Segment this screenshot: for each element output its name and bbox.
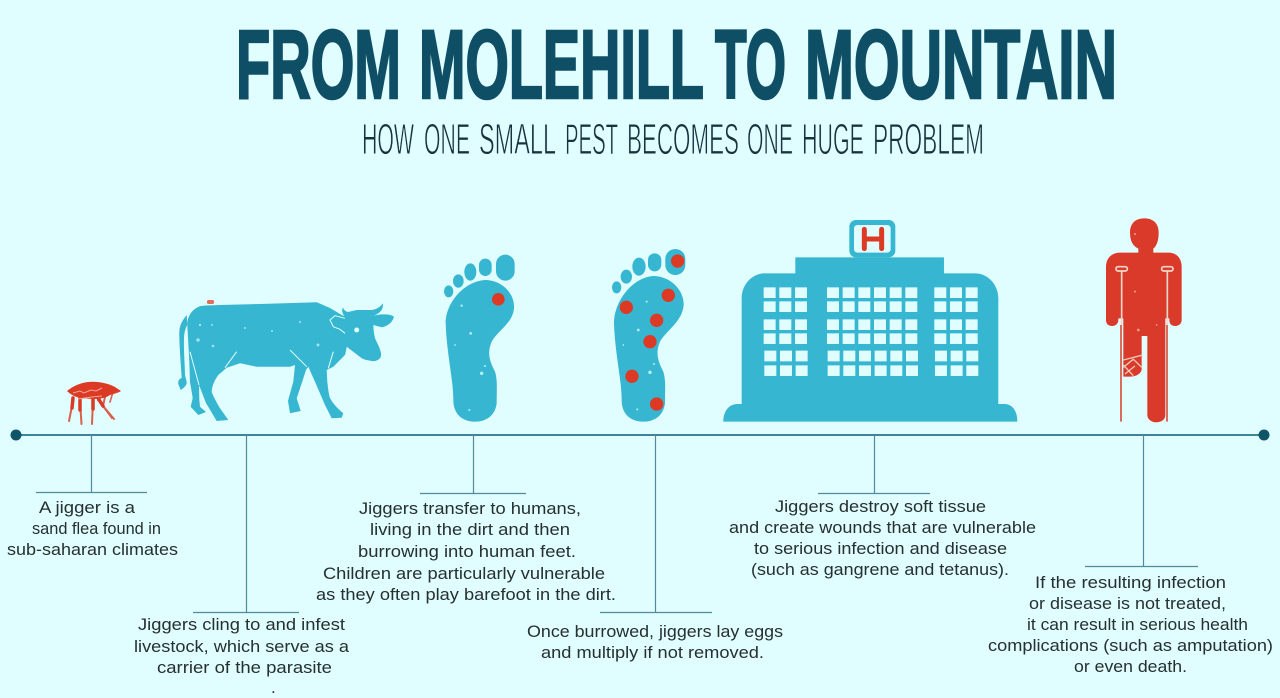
subtitle <box>362 115 984 164</box>
timeline <box>10 430 1270 612</box>
icon: person with amputated leg on crutches <box>1106 218 1182 422</box>
subtitle: HOW <box>362 115 414 164</box>
text block: livestock <box>134 615 350 697</box>
title: TO <box>715 10 786 119</box>
text block: jigger definition: sub-saharan climates <box>7 540 178 559</box>
title: MOLEHILL <box>419 10 704 119</box>
text block: tissue damage: Jiggers destroy soft tissue <box>775 497 986 516</box>
text block: health complications <box>988 573 1273 676</box>
text block: transfer to humans: Children are particularly vulnerable <box>323 564 605 583</box>
text block: tissue damage: (such as gangrene and tetanus). <box>751 560 1009 579</box>
text block: transfer to humans: Jiggers transfer to humans, <box>359 499 581 518</box>
subtitle: HUGE <box>802 115 864 164</box>
text block: eggs: and multiply if not removed. <box>541 643 764 662</box>
icon: cow <box>178 300 394 421</box>
text block: jigger definition: sand flea found in <box>32 519 161 538</box>
text block: livestock: . <box>271 678 276 697</box>
title: FROM <box>236 10 401 119</box>
subtitle: PROBLEM <box>873 115 984 164</box>
subtitle: PEST <box>565 115 618 164</box>
subtitle: ONE <box>424 115 470 164</box>
text block: eggs: Once burrowed, jiggers lay eggs <box>527 622 783 641</box>
text block: jigger definition: A jigger is a <box>39 498 136 517</box>
text block: transfer to humans: burrowing into human feet. <box>358 542 576 561</box>
icon: hospital <box>723 220 1017 422</box>
text block: tissue damage: and create wounds that are vulnerable <box>729 518 1036 537</box>
text block: transfer to humans: living in the dirt and then <box>370 520 570 539</box>
text block: livestock: carrier of the parasite <box>157 658 332 677</box>
subtitle: SMALL <box>479 115 556 164</box>
icon: foot with many jiggers <box>612 249 685 422</box>
subtitle: ONE <box>747 115 793 164</box>
text block: eggs <box>527 622 783 662</box>
text block: transfer to humans <box>316 499 616 604</box>
text block: jigger definition <box>7 498 178 559</box>
subtitle: BECOMES <box>627 115 739 164</box>
text block: livestock: livestock, which serve as a <box>134 637 350 656</box>
icon: foot with one jigger <box>444 255 515 422</box>
text block: health complications: or even death. <box>1074 657 1187 676</box>
text block: health complications: If the resulting infection <box>1035 573 1226 592</box>
text block: tissue damage: to serious infection and disease <box>754 539 1007 558</box>
text block: transfer to humans: as they often play barefoot in the dirt. <box>316 585 616 604</box>
text block: health complications: complications (such as amputation) <box>988 636 1273 655</box>
text block: tissue damage <box>729 497 1036 579</box>
text block: livestock: Jiggers cling to and infest <box>138 615 345 634</box>
title <box>236 10 1117 119</box>
text block: health complications: it can result in serious health <box>1027 615 1248 634</box>
text block: health complications: or disease is not treated, <box>1029 594 1226 613</box>
icon: flea <box>67 382 121 424</box>
